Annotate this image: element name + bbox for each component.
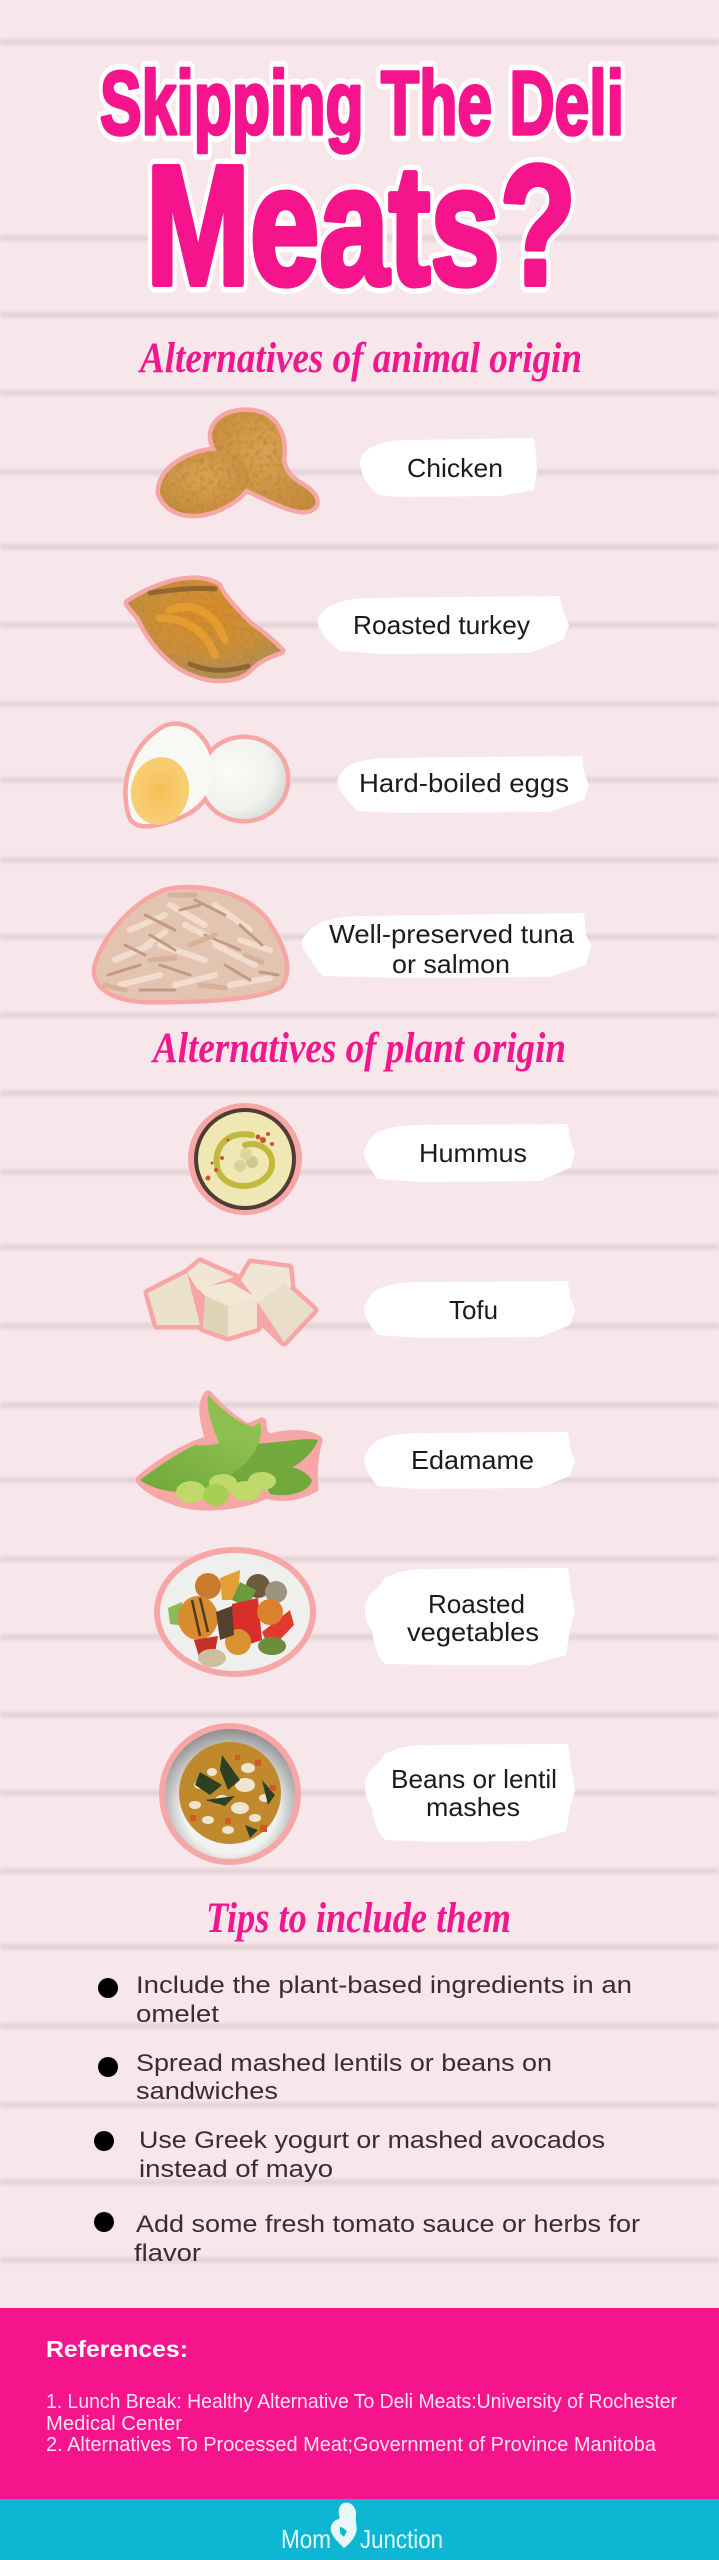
label: tofu xyxy=(364,1281,575,1338)
tip 1: omelet xyxy=(136,2001,219,2028)
icon: fried chicken xyxy=(160,412,315,514)
references text: 1. Lunch Break: Healthy Alternative To Deli Meats:University of Rochester xyxy=(46,2391,677,2413)
tip 3: instead of mayo xyxy=(139,2156,333,2183)
references text xyxy=(46,2391,677,2456)
item: chicken xyxy=(160,412,537,514)
references heading: References: xyxy=(46,2336,188,2362)
tip 4: flavor xyxy=(134,2240,201,2267)
label: hummus xyxy=(364,1124,575,1182)
tip 3 xyxy=(94,2127,605,2183)
icon: edamame pods xyxy=(140,1395,318,1506)
tip 1: Include the plant-based ingredients in an xyxy=(136,1972,632,1999)
label: roasted vegetables xyxy=(365,1568,575,1665)
label: tuna or salmon xyxy=(302,913,591,979)
tip 2: sandwiches xyxy=(136,2078,278,2105)
tip 2: Spread mashed lentils or beans on xyxy=(136,2050,552,2077)
icon: bean soup bowl xyxy=(159,1723,301,1865)
panel: references xyxy=(0,2308,719,2499)
label: tofu: Tofu xyxy=(449,1295,498,1325)
item: roasted vegetables xyxy=(154,1547,575,1677)
tip 4: Add some fresh tomato sauce or herbs for xyxy=(136,2211,640,2238)
heading: tips to include them: Tips to include them xyxy=(206,1895,511,1942)
label: tuna or salmon: or salmon xyxy=(392,949,510,979)
logo: MomJunction: Mom xyxy=(281,2524,331,2554)
icon: hummus bowl xyxy=(188,1103,302,1215)
label: roasted vegetables: vegetables xyxy=(407,1617,539,1647)
label: chicken xyxy=(360,438,537,497)
icon: roasted turkey xyxy=(128,580,281,679)
icon: flaked tuna xyxy=(96,889,285,1000)
item: roasted turkey xyxy=(128,580,569,679)
tips list xyxy=(94,1972,640,2267)
tip 1 xyxy=(98,1972,632,2028)
label: hard-boiled eggs xyxy=(338,756,589,813)
item: beans or lentil mashes xyxy=(159,1723,575,1865)
logo: MomJunction: Junction xyxy=(360,2524,443,2554)
title: Meats? xyxy=(146,131,576,321)
heading: alternatives of plant origin: Alternatives of plant origin xyxy=(150,1025,566,1072)
title xyxy=(100,54,624,321)
item: edamame xyxy=(140,1395,575,1506)
item: tuna or salmon xyxy=(96,889,591,1000)
heading: alternatives of animal origin: Alternatives of animal origin xyxy=(137,335,582,382)
label: roasted vegetables: Roasted xyxy=(428,1589,525,1619)
title: Meats? xyxy=(146,131,576,321)
label: chicken: Chicken xyxy=(407,453,503,483)
tip 2 xyxy=(98,2050,552,2105)
icon: tofu cubes xyxy=(148,1262,314,1342)
references text: Medical Center xyxy=(46,2413,182,2435)
label: edamame: Edamame xyxy=(411,1445,534,1475)
item: hummus xyxy=(188,1103,575,1215)
label: beans or lentil mashes: Beans or lentil xyxy=(391,1764,557,1794)
label: hummus: Hummus xyxy=(419,1138,527,1168)
logo: MomJunction xyxy=(281,2503,443,2554)
references text: 2. Alternatives To Processed Meat;Government of Province Manitoba xyxy=(46,2434,657,2456)
item: hard-boiled eggs xyxy=(126,726,589,830)
label: roasted turkey xyxy=(318,596,569,654)
icon: hard-boiled eggs xyxy=(126,726,286,830)
tip 4 xyxy=(94,2211,640,2267)
label: beans or lentil mashes xyxy=(365,1744,575,1842)
label: edamame xyxy=(364,1432,575,1489)
panel: footer xyxy=(0,2499,719,2560)
label: tuna or salmon: Well-preserved tuna xyxy=(329,919,575,949)
item: tofu xyxy=(148,1262,575,1342)
icon: roasted vegetables plate xyxy=(154,1547,316,1677)
label: beans or lentil mashes: mashes xyxy=(426,1792,520,1822)
tip 3: Use Greek yogurt or mashed avocados xyxy=(139,2127,605,2154)
label: hard-boiled eggs: Hard-boiled eggs xyxy=(359,768,569,798)
label: roasted turkey: Roasted turkey xyxy=(353,610,530,640)
